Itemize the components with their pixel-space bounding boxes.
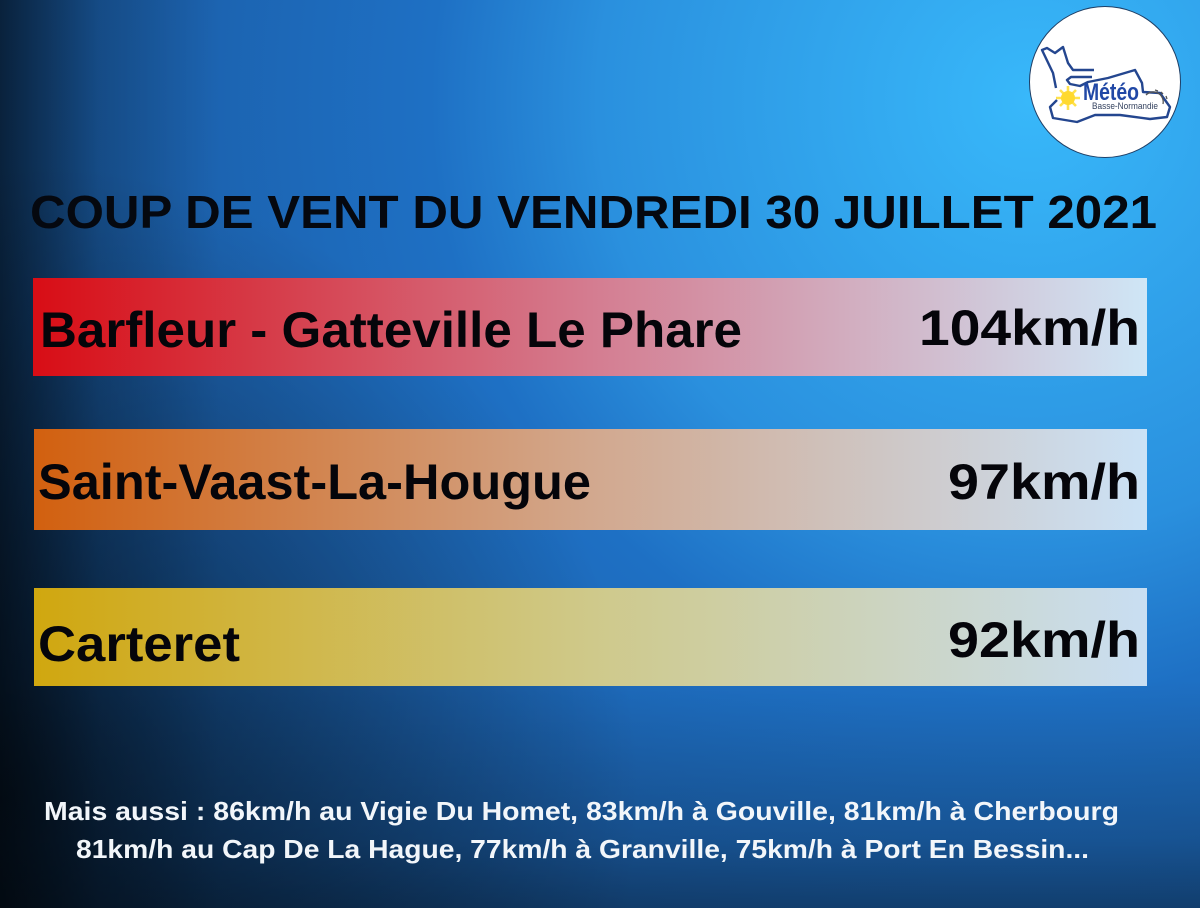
- station name: Carteret: [38, 616, 240, 672]
- icon: sun: [1056, 86, 1080, 110]
- logo wordmark: Météo: [1083, 79, 1139, 106]
- logo: Météo Basse-Normandie: [1030, 6, 1180, 158]
- footer text: [44, 796, 1119, 864]
- bar: Carteret: [34, 588, 1147, 686]
- wind speed: 104km/h: [919, 300, 1140, 356]
- bar: Barfleur: [33, 278, 1147, 376]
- footer text: Mais aussi : 86km/h au Vigie Du Homet, 83km/h à Gouville, 81km/h à Cherbourg: [44, 796, 1119, 826]
- footer text: 81km/h au Cap De La Hague, 77km/h à Granville, 75km/h à Port En Bessin...: [76, 834, 1089, 864]
- station name: Barfleur - Gatteville Le Phare: [40, 302, 742, 358]
- icon: Normandy map outline: [1042, 47, 1170, 122]
- station name: Saint-Vaast-La-Hougue: [38, 454, 591, 510]
- wind speed: 97km/h: [948, 454, 1140, 510]
- wind speed: 92km/h: [948, 612, 1140, 668]
- bar: Saint-Vaast-La-Hougue: [34, 429, 1147, 530]
- title: COUP DE VENT DU VENDREDI 30 JUILLET 2021: [30, 186, 1157, 238]
- logo subtitle: Basse-Normandie: [1092, 101, 1158, 112]
- icon: small sun outline: [1146, 90, 1167, 104]
